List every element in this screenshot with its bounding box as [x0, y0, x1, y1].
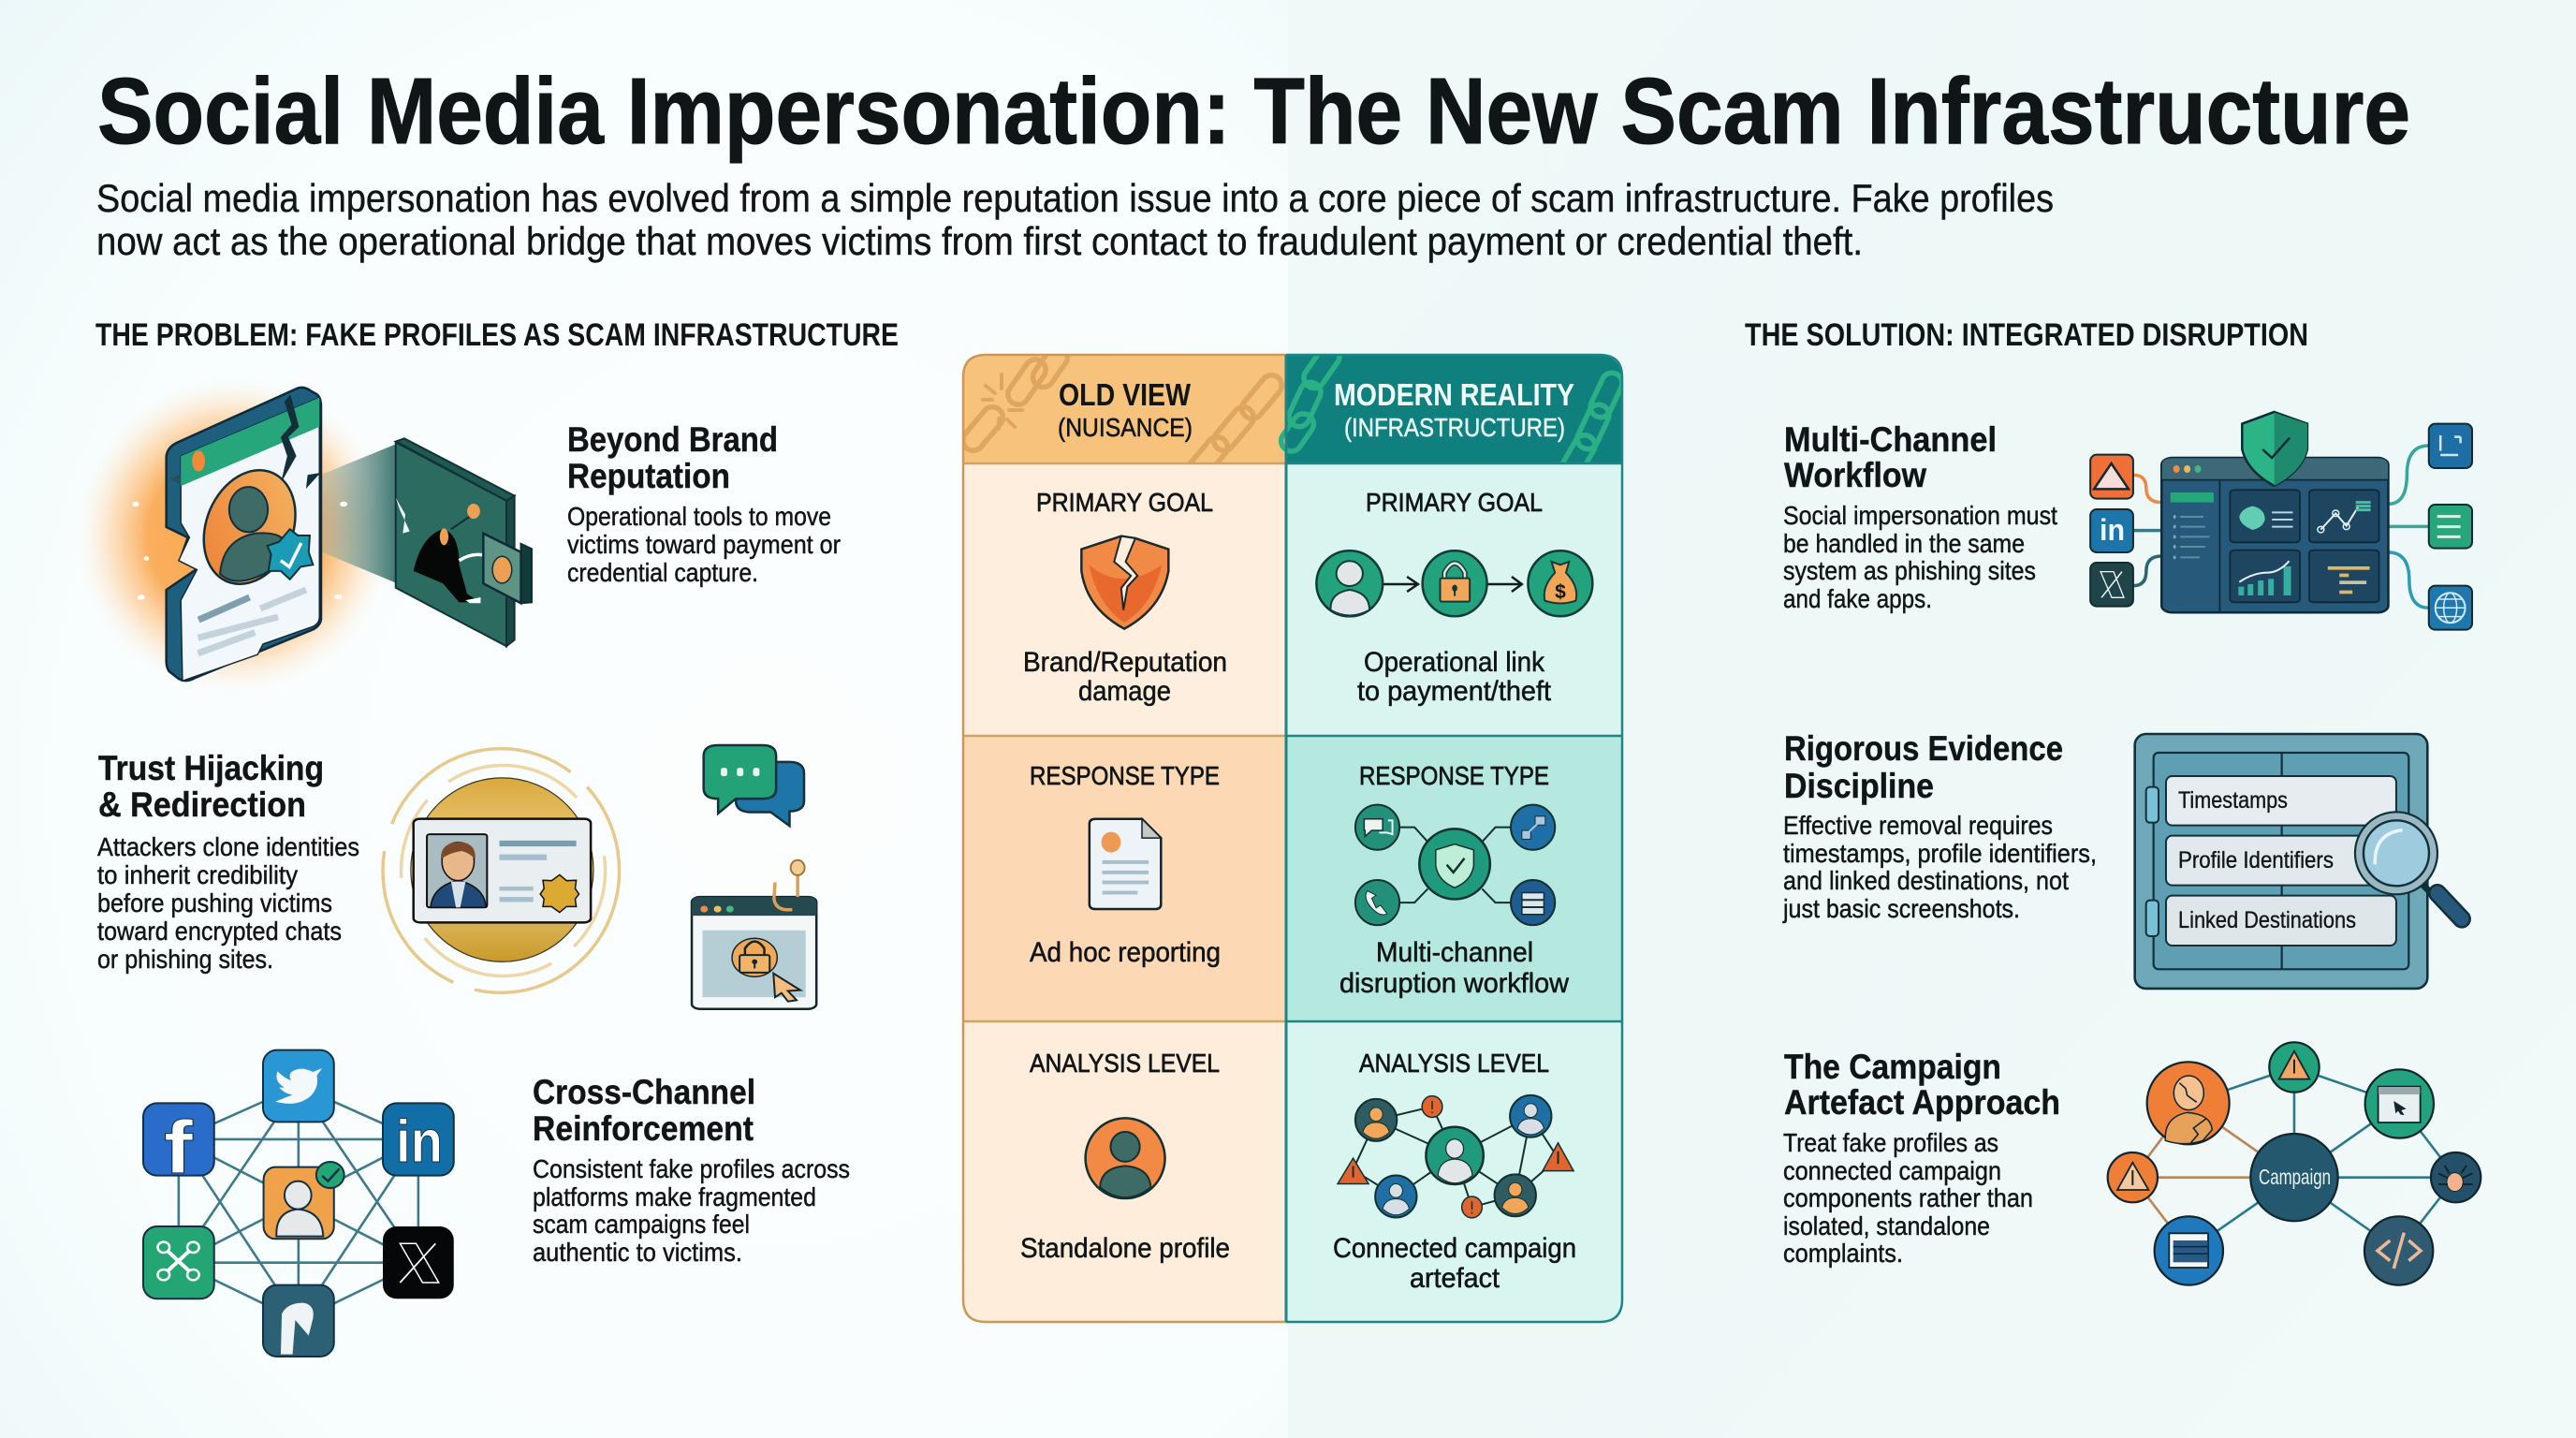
table grid lines and border: [963, 355, 1622, 1322]
text block: rigorous evidence discipline: [1782, 729, 2097, 923]
intro text: now act as the operational bridge that moves victims from first contact to fraudulent payment or credential theft.: [96, 219, 1863, 263]
row: primary goal, old view: PRIMARY GOAL: [1036, 488, 1213, 517]
icon: cracked fake profile and hacker panel: [77, 378, 532, 693]
text block: rigorous evidence discipline: just basic screenshots.: [1782, 894, 2020, 923]
table cell fills: [963, 355, 1622, 1322]
text block: trust hijacking and redirection: before pushing victims: [97, 888, 332, 917]
text block: multi-channel workflow: Social impersonation must: [1783, 501, 2057, 530]
row: analysis level, modern reality: artefact: [1410, 1263, 1500, 1294]
icon: connected campaign network: [1338, 1095, 1573, 1218]
text block: rigorous evidence discipline: and linked destinations, not: [1783, 866, 2069, 895]
icon: report document: [1090, 819, 1161, 909]
row: primary goal, modern reality: [1316, 488, 1592, 707]
text block: beyond brand reputation: credential capture.: [567, 558, 758, 587]
text block: beyond brand reputation: [567, 420, 841, 587]
column header: old view: OLD VIEW: [1059, 377, 1192, 412]
text block: trust hijacking and redirection: or phishing sites.: [97, 945, 273, 974]
icon: cross-channel social network: f: [164, 1106, 193, 1189]
row: response type, modern reality: Multi-channel: [1376, 937, 1533, 968]
row: response type, modern reality: disruption workflow: [1339, 968, 1569, 999]
text block: trust hijacking and redirection: Attackers clone identities: [97, 832, 359, 861]
icon: chat bubbles: [704, 745, 804, 826]
icon: evidence vault with magnifier: Profile Identifiers: [2178, 847, 2334, 873]
icon: disruption hub: [1355, 805, 1555, 925]
icon: unified dashboard with shield and channels: [2090, 412, 2472, 630]
icon: campaign network: [2108, 1042, 2481, 1285]
row: response type, old view: RESPONSE TYPE: [1030, 761, 1220, 790]
icon: evidence vault with magnifier: Timestamps: [2178, 787, 2288, 814]
intro text: [96, 176, 2054, 263]
icon: evidence vault with magnifier: Linked Destinations: [2178, 907, 2356, 933]
text block: the campaign artefact approach: [1783, 1048, 2060, 1268]
text block: rigorous evidence discipline: Discipline: [1784, 767, 1934, 805]
text block: the campaign artefact approach: complaints.: [1783, 1239, 1903, 1268]
row: analysis level, modern reality: [1333, 1049, 1576, 1294]
text block: beyond brand reputation: Operational tools to move: [567, 502, 831, 531]
row: response type, modern reality: RESPONSE TYPE: [1359, 761, 1549, 790]
icon: broken shield: [1081, 536, 1168, 629]
text block: multi-channel workflow: be handled in the same: [1783, 529, 2025, 558]
row: response type, old view: Ad hoc reporting: [1030, 937, 1221, 968]
text block: the campaign artefact approach: Treat fake profiles as: [1783, 1128, 1998, 1157]
row: primary goal, old view: [1023, 488, 1227, 707]
text block: the campaign artefact approach: isolated, standalone: [1783, 1211, 1990, 1240]
text block: multi-channel workflow: system as phishing sites: [1783, 556, 2036, 585]
column header: old view: [1058, 377, 1193, 442]
text block: trust hijacking and redirection: toward encrypted chats: [97, 917, 342, 946]
row: analysis level, old view: [1020, 1049, 1230, 1264]
row: response type, old view: [1030, 761, 1221, 968]
heading: the problem: THE PROBLEM: FAKE PROFILES AS SCAM INFRASTRUCTURE: [95, 317, 899, 353]
text block: rigorous evidence discipline: Effective removal requires: [1783, 811, 2053, 840]
icon: unified dashboard with shield and channels: in: [2100, 513, 2125, 547]
text block: beyond brand reputation: Reputation: [567, 457, 730, 495]
row: primary goal, modern reality: Operational link: [1364, 647, 1545, 678]
text block: cross-channel reinforcement: Cross-Channel: [533, 1073, 755, 1111]
row: primary goal, old view: damage: [1078, 676, 1171, 707]
text block: the campaign artefact approach: components rather than: [1783, 1183, 2033, 1212]
column header: modern reality: [1334, 377, 1574, 442]
intro text: Social media impersonation has evolved from a simple reputation issue into a core piece of scam infrastructure. Fake profiles: [96, 176, 2054, 220]
row: response type, modern reality: [1339, 761, 1569, 999]
icon: identity card in gold circle: [383, 749, 620, 992]
text block: multi-channel workflow: [1783, 420, 2057, 613]
text block: rigorous evidence discipline: Rigorous Evidence: [1784, 729, 2063, 768]
text block: cross-channel reinforcement: Reinforcement: [533, 1109, 754, 1148]
text block: beyond brand reputation: victims toward payment or: [567, 530, 841, 559]
text block: multi-channel workflow: Multi-Channel: [1784, 420, 1997, 459]
icon: chain links in header: [964, 356, 1621, 462]
heading: the solution: THE SOLUTION: INTEGRATED DISRUPTION: [1745, 317, 2308, 353]
comparison table: [959, 342, 1626, 1322]
row: primary goal, modern reality: to payment/theft: [1357, 676, 1552, 707]
icon: evidence vault with magnifier: [2135, 734, 2462, 989]
icon: phishing browser with hook and lock: [692, 860, 816, 1009]
column header: modern reality: (INFRASTRUCTURE): [1344, 413, 1565, 442]
text block: multi-channel workflow: Workflow: [1784, 456, 1926, 494]
text block: cross-channel reinforcement: Consistent fake profiles across: [533, 1154, 850, 1183]
text block: trust hijacking and redirection: [97, 749, 359, 974]
text block: cross-channel reinforcement: platforms make fragmented: [533, 1182, 816, 1211]
row: primary goal, modern reality: PRIMARY GOAL: [1366, 488, 1543, 517]
text block: cross-channel reinforcement: authentic to victims.: [533, 1238, 742, 1267]
text block: trust hijacking and redirection: Trust Hijacking: [98, 749, 324, 787]
text block: beyond brand reputation: Beyond Brand: [567, 420, 778, 459]
icon: standalone profile: [1086, 1118, 1165, 1198]
text block: the campaign artefact approach: connected campaign: [1783, 1156, 2001, 1185]
icon: person to lock to money flow: $: [1555, 581, 1566, 603]
icon: cross-channel social network: [143, 1050, 454, 1357]
text block: the campaign artefact approach: Artefact Approach: [1784, 1083, 2060, 1122]
row: primary goal, old view: Brand/Reputation: [1023, 647, 1227, 678]
text block: trust hijacking and redirection: to inherit credibility: [97, 860, 298, 889]
row: analysis level, old view: Standalone profile: [1020, 1233, 1230, 1264]
text block: cross-channel reinforcement: scam campaigns feel: [533, 1210, 750, 1239]
row: analysis level, modern reality: Connected campaign: [1333, 1233, 1576, 1264]
text block: trust hijacking and redirection: & Redirection: [98, 785, 306, 824]
column header: old view: (NUISANCE): [1058, 413, 1193, 442]
text block: multi-channel workflow: and fake apps.: [1783, 584, 1932, 613]
text block: rigorous evidence discipline: timestamps, profile identifiers,: [1783, 839, 2097, 868]
row: analysis level, old view: ANALYSIS LEVEL: [1030, 1049, 1220, 1078]
icon: campaign network: Campaign: [2259, 1165, 2331, 1189]
row: analysis level, modern reality: ANALYSIS LEVEL: [1359, 1049, 1549, 1078]
icon: cross-channel social network: in: [396, 1108, 443, 1175]
column header: modern reality: MODERN REALITY: [1334, 377, 1574, 412]
text block: the campaign artefact approach: The Campaign: [1784, 1048, 2001, 1086]
text block: cross-channel reinforcement: [533, 1073, 850, 1267]
icon: person to lock to money flow: [1316, 550, 1592, 616]
